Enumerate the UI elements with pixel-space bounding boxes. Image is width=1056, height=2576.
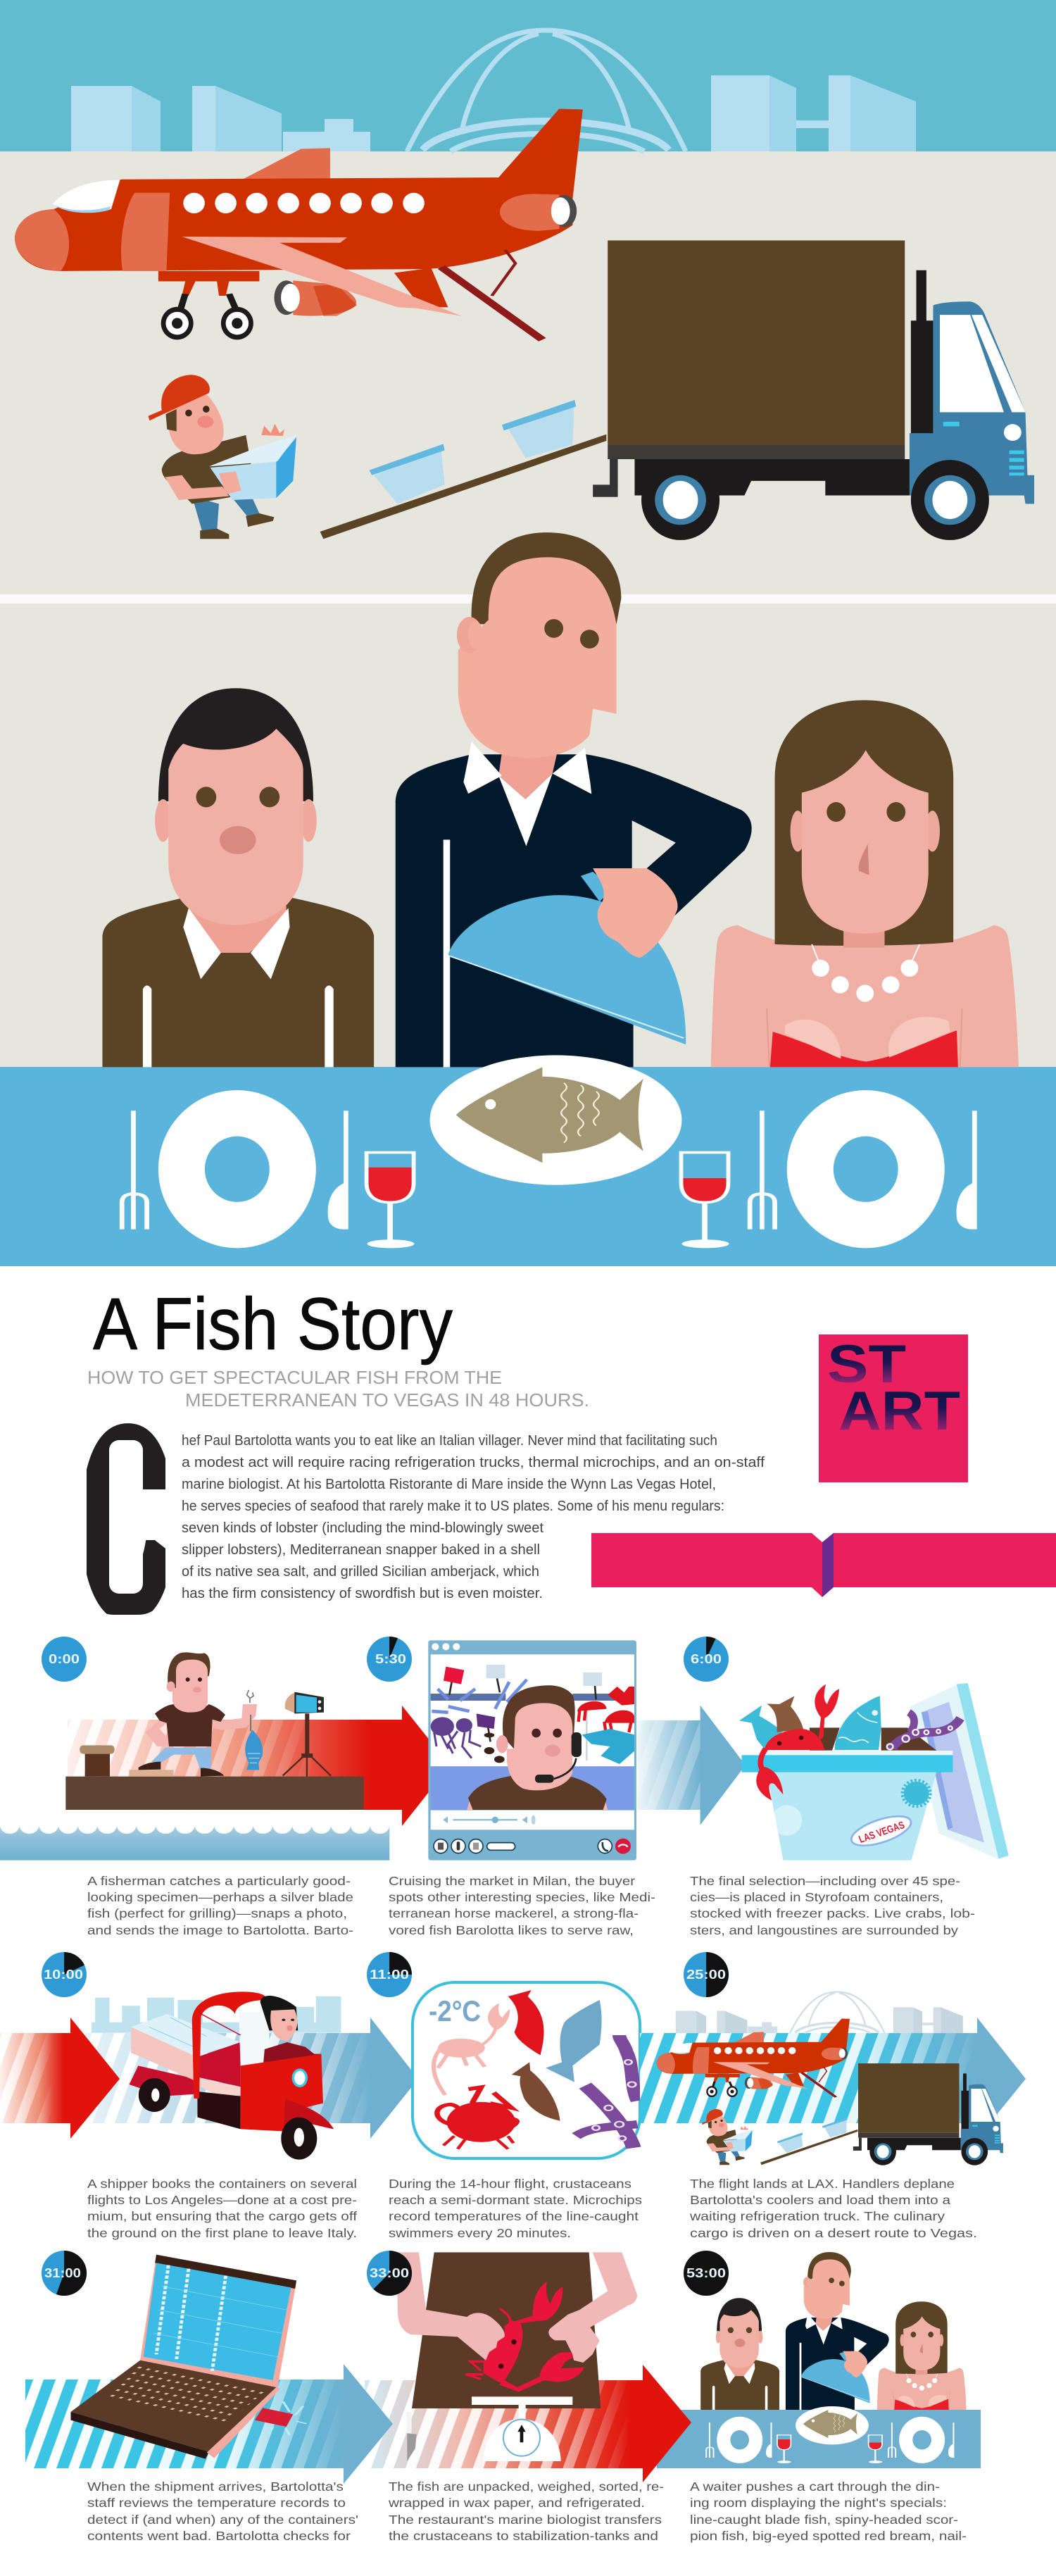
start block: ST	[827, 1334, 906, 1394]
step 1 band	[68, 1720, 403, 1810]
diners scene	[102, 532, 1019, 1248]
cooler stickers	[772, 1780, 931, 1851]
step 9 caption: A waiter pushes a cart through the din-	[690, 2480, 940, 2494]
step 7 timer: 31:00	[44, 2266, 81, 2280]
step 6 timer	[684, 1952, 729, 1997]
title: A Fish Story	[93, 1283, 453, 1365]
step 6 caption	[689, 2177, 977, 2240]
step 5 caption: swimmers every 20 minutes.	[389, 2226, 571, 2240]
left plate and cutlery	[122, 1090, 348, 1248]
kitchen scale	[472, 2396, 572, 2461]
step 9 caption: pion fish, big-eyed spotted red bream, nail-	[690, 2529, 967, 2543]
subtitle: HOW TO GET SPECTACULAR FISH FROM THE	[87, 1367, 502, 1388]
step 8 arrow head	[643, 2365, 691, 2482]
drop cap	[87, 1423, 165, 1615]
step 6 caption: Bartolotta's coolers and load them into a	[690, 2193, 950, 2207]
step 5 timer: 11:00	[370, 1968, 409, 1982]
step 7 caption: staff reviews the temperature records to	[87, 2496, 346, 2510]
step 4 right band	[70, 2033, 371, 2123]
step 3 band	[637, 1720, 700, 1810]
step 8 caption: the crustaceans to stabilization-tanks and	[389, 2529, 658, 2543]
intro paragraph: of its native sea salt, and grilled Sicilian amberjack, which	[182, 1564, 539, 1580]
step 9 timer	[684, 2251, 729, 2296]
step 6 arrow head	[977, 2018, 1026, 2139]
step 3 cooler with seafood	[700, 1683, 1009, 1861]
arrow head	[700, 1706, 746, 1825]
step 8 caption: The fish are unpacked, weighed, sorted, re-	[389, 2480, 664, 2494]
ground background lower	[0, 604, 1056, 1068]
left diner	[102, 688, 374, 1067]
step 8 weighing seafood	[396, 2252, 637, 2461]
step 7 band	[25, 2380, 344, 2468]
delivery truck	[593, 240, 1034, 540]
market stalls	[431, 1665, 634, 1764]
step 3 caption: cies—is placed in Styrofoam containers,	[690, 1890, 943, 1904]
step 4 three-wheeler with driver	[130, 1992, 334, 2160]
right wine glass	[681, 1153, 729, 1248]
airplane	[15, 108, 583, 339]
step 1 water	[0, 1817, 389, 1861]
step 2 caption	[389, 1874, 655, 1937]
sea creatures	[434, 1990, 637, 2149]
drop cap: C	[82, 1386, 169, 1661]
step 7 laptop	[70, 2255, 306, 2459]
step 7 timer	[42, 2251, 87, 2296]
step 2 caption: terranean horse mackerel, a strong-fla-	[389, 1906, 639, 1920]
step 9 caption: ing room displaying the night's specials:	[690, 2496, 947, 2510]
white divider strip	[0, 594, 1056, 604]
step 5 caption: During the 14-hour flight, crustaceans	[389, 2177, 631, 2191]
step 1 arrow head	[402, 1706, 450, 1826]
seafood	[739, 1684, 960, 1801]
fisherman	[139, 1652, 263, 1777]
knife	[406, 2412, 417, 2461]
step 7 caption	[87, 2480, 358, 2543]
step 6 timer: 25:00	[686, 1968, 726, 1982]
step 1 fisherman on pier	[65, 1652, 364, 1810]
intro paragraph: marine biologist. At his Bartolotta Ristorante di Mare inside the Wynn Las Vegas Hotel,	[182, 1477, 716, 1492]
step 9 miniature diners	[700, 2252, 967, 2463]
place settings	[122, 1055, 977, 1248]
step 6 miniature cargo scene	[657, 2019, 1003, 2165]
start block	[819, 1334, 968, 1482]
step 6 miniature skyline	[676, 1992, 963, 2033]
step 8 timer: 33:00	[370, 2266, 409, 2280]
cooler body	[742, 1727, 953, 1861]
step 9 table band	[657, 2410, 981, 2468]
start block: ART	[838, 1380, 960, 1442]
camera on tripod	[283, 1692, 331, 1777]
step 4 timer	[42, 1952, 87, 1997]
step 7 arrow head	[344, 2364, 393, 2484]
cooler stickers: LAS VEGAS	[857, 1820, 906, 1846]
woman diner	[711, 700, 1019, 1067]
step 7 caption: When the shipment arrives, Bartolotta's	[87, 2480, 344, 2494]
step 2 caption: Cruising the market in Milan, the buyer	[389, 1874, 635, 1888]
step 4 skyline	[92, 1996, 341, 2033]
temperature reading: -2°C	[429, 1994, 481, 2027]
step 4 caption: A shipper books the containers on several	[87, 2177, 357, 2191]
step 2 video call window	[428, 1640, 636, 1861]
sky background	[0, 0, 1056, 152]
step 3 caption: The final selection—including over 45 spe-	[690, 1874, 960, 1888]
volume slider	[443, 1815, 536, 1825]
worker carrying cooler	[149, 375, 296, 539]
left wine glass	[367, 1153, 415, 1248]
step 5 caption: reach a semi-dormant state. Microchips	[389, 2193, 642, 2207]
call buttons	[434, 1839, 631, 1854]
skyline with theme building arch	[71, 30, 916, 151]
step 8 band	[365, 2380, 643, 2468]
step 1 caption: A fisherman catches a particularly good-	[87, 1874, 351, 1888]
step 6 caption: cargo is driven on a desert route to Vegas.	[690, 2226, 977, 2240]
step 5 timer	[367, 1952, 412, 1997]
intro paragraph	[182, 1433, 765, 1601]
step 8 caption	[388, 2480, 664, 2543]
step 2 timer: 5:30	[375, 1652, 406, 1666]
step 9 caption	[690, 2480, 967, 2543]
table cloth	[0, 1067, 1056, 1266]
intro paragraph: he serves species of seafood that rarely make it to US plates. Some of his menu regulars:	[182, 1499, 724, 1514]
step 1 caption: and sends the image to Bartolotta. Barto-	[87, 1923, 353, 1937]
fish platter	[430, 1055, 681, 1185]
intro paragraph: hef Paul Bartolotta wants you to eat like an Italian villager. Never mind that facilitating such	[182, 1433, 717, 1449]
usb drive	[255, 2401, 306, 2435]
step 1 caption: fish (perfect for grilling)—snaps a photo,	[87, 1906, 347, 1920]
step 8 timer	[367, 2251, 412, 2296]
step 4 left band	[0, 2033, 70, 2123]
step 5 caption	[389, 2177, 642, 2240]
waiter with cloche	[396, 532, 752, 1067]
arms	[396, 2252, 637, 2363]
step 1 timer	[42, 1637, 87, 1682]
step 1 timer: 0:00	[49, 1652, 80, 1666]
pier	[65, 1745, 364, 1810]
step 7 caption: detect if (and when) any of the containers'	[87, 2513, 358, 2527]
step 6 band	[640, 2033, 977, 2123]
buyer with headset	[467, 1685, 608, 1810]
step 4 red arrow head	[70, 2018, 120, 2139]
step 4 timer: 10:00	[44, 1968, 83, 1982]
step 3 caption: sters, and langoustines are surrounded by	[690, 1923, 958, 1937]
step 4 caption: mium, but ensuring that the cargo gets off	[87, 2209, 357, 2223]
step 6 caption: The flight lands at LAX. Handlers deplane	[690, 2177, 955, 2191]
step 7 caption: contents went bad. Bartolotta checks for	[87, 2529, 351, 2543]
step 2 caption: vored fish Barolotta likes to serve raw,	[389, 1923, 634, 1937]
step 9 timer: 53:00	[686, 2266, 726, 2280]
step 3 timer	[684, 1637, 729, 1682]
ramp with coolers	[320, 400, 606, 539]
step 8 caption: wrapped in wax paper, and refrigerated.	[388, 2496, 645, 2510]
step 4 blue arrow head	[370, 2018, 418, 2139]
subtitle	[87, 1367, 589, 1411]
ground background	[0, 151, 1056, 594]
right plate and cutlery	[750, 1090, 977, 1248]
airport cargo scene	[15, 108, 1034, 540]
step 2 caption: spots other interesting species, like Medi-	[389, 1890, 655, 1904]
intro paragraph: a modest act will require racing refrigeration trucks, thermal microchips, and an on-staff	[182, 1455, 765, 1470]
step 4 caption: the ground on the first plane to leave Italy.	[87, 2226, 357, 2240]
step 4 caption	[87, 2177, 357, 2240]
ribbon	[591, 1533, 1056, 1597]
step 5 chilled seafood panel	[413, 1982, 640, 2158]
open door	[910, 1683, 1009, 1859]
apron	[412, 2252, 601, 2408]
keyboard base	[70, 2361, 280, 2459]
intro paragraph: slipper lobsters), Mediterranean snapper baked in a shell	[182, 1542, 540, 1558]
step 8 caption: The restaurant's marine biologist transfers	[389, 2513, 662, 2527]
lobster	[466, 2282, 584, 2392]
step 6 caption: waiting refrigeration truck. The culinary	[689, 2209, 945, 2223]
step 9 caption: line-caught blade fish, spiny-headed scor-	[690, 2513, 958, 2527]
step 3 caption	[690, 1874, 975, 1937]
intro paragraph: seven kinds of lobster (including the mind-blowingly sweet	[182, 1520, 543, 1536]
screen	[140, 2255, 296, 2388]
step 4 caption: flights to Los Angeles—done at a cost pre-	[87, 2193, 357, 2207]
subtitle: MEDETERRANEAN TO VEGAS IN 48 HOURS.	[185, 1389, 589, 1411]
step 1 caption: looking specimen—perhaps a silver blade	[87, 1890, 353, 1904]
step 3 caption: stocked with freezer packs. Live crabs, lob-	[690, 1906, 975, 1920]
step 2 timer	[367, 1637, 412, 1682]
step 3 timer: 6:00	[691, 1652, 722, 1666]
step 1 caption	[87, 1874, 353, 1937]
window dots	[432, 1643, 460, 1650]
intro paragraph: has the firm consistency of swordfish but is even moister.	[182, 1586, 543, 1601]
step 5 caption: record temperatures of the line-caught	[389, 2209, 639, 2223]
